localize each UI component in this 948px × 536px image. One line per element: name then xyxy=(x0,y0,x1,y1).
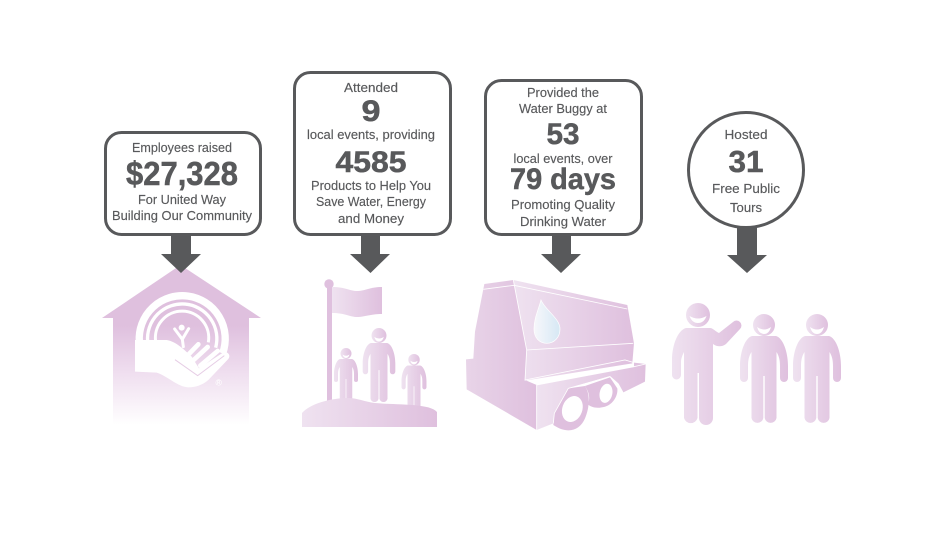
arrow: down to group xyxy=(727,227,767,273)
person: visitor xyxy=(740,314,788,423)
icon: tour group xyxy=(672,303,841,425)
callout: water buggy events: Provided the xyxy=(527,85,599,100)
callout: employees raised: Building Our Community xyxy=(112,208,252,223)
panel: local events xyxy=(294,72,450,427)
callout: events and products xyxy=(294,72,450,234)
callout: hosted tours: 31 xyxy=(728,144,764,179)
callout: employees raised: $27,328 xyxy=(126,155,238,192)
panel: water buggy xyxy=(466,80,646,430)
callout: water buggy events: 53 xyxy=(546,118,580,151)
icon: United Way house logo: ® xyxy=(215,377,222,387)
callout: events and products: 9 xyxy=(362,95,380,128)
callout: employees raised: For United Way xyxy=(138,192,226,207)
panel: public tours xyxy=(672,112,841,425)
arrow: down to flag xyxy=(350,235,390,273)
callout: events and products: 4585 xyxy=(336,146,406,179)
callout: events and products: and Money xyxy=(338,211,405,226)
callout: employees raised xyxy=(106,132,260,234)
arrow: down to trailer xyxy=(541,235,581,273)
callout: water buggy events: Drinking Water xyxy=(520,214,607,229)
icon: people on hill with flag xyxy=(302,279,437,427)
person: visitor xyxy=(793,314,841,423)
callout: water buggy events: Promoting Quality xyxy=(511,197,615,212)
callout: hosted tours xyxy=(688,112,804,228)
callout: events and products: Products to Help You xyxy=(311,178,431,193)
callout: hosted tours: Tours xyxy=(730,200,762,215)
person: guide xyxy=(672,303,741,425)
callout: events and products: local events, providing xyxy=(307,127,435,142)
callout: events and products: Save Water, Energy xyxy=(316,194,426,209)
callout: hosted tours: Free Public xyxy=(712,181,781,196)
callout: water buggy events: local events, over xyxy=(514,151,613,166)
callout: employees raised: Employees raised xyxy=(132,140,232,155)
callout: water buggy events: Water Buggy at xyxy=(519,101,607,116)
panel: United Way fundraising xyxy=(102,132,261,425)
callout: water buggy events xyxy=(486,80,642,234)
icon: water buggy trailer xyxy=(466,280,646,430)
callout: hosted tours: Hosted xyxy=(724,127,768,142)
arrow: down to house xyxy=(161,235,201,273)
icon: United Way house logo xyxy=(102,265,261,425)
callout: events and products: Attended xyxy=(344,80,398,95)
callout: water buggy events: 79 days xyxy=(510,163,616,196)
